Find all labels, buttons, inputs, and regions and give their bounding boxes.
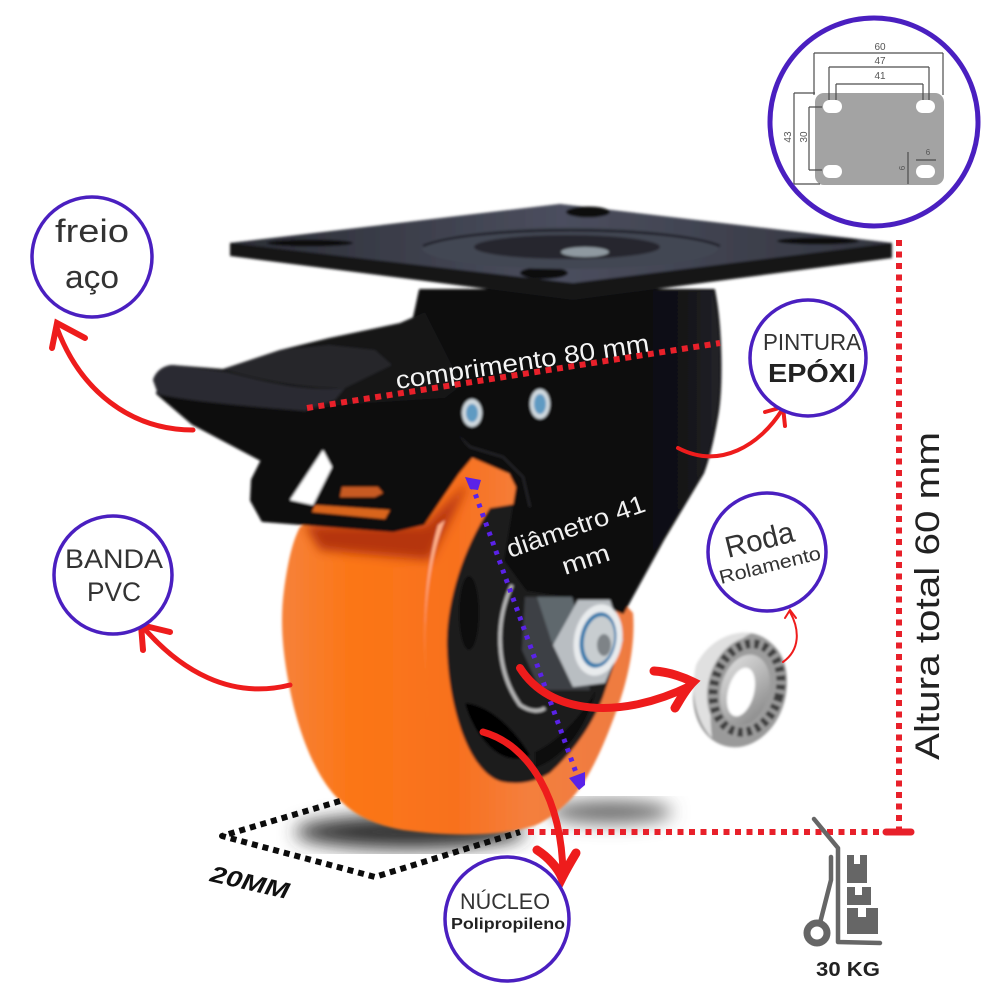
label: altura total: Altura total 60 mm <box>909 432 947 760</box>
callout: banda pvc <box>54 516 172 634</box>
icon: hand truck with boxes <box>807 819 880 943</box>
dimension numbers: 30 <box>799 131 810 143</box>
callout: roda rolamento <box>708 493 826 611</box>
ball bearing <box>681 622 799 758</box>
arrow: pintura <box>678 407 785 456</box>
arrow: freio <box>52 323 193 430</box>
label: 30 KG: 30 KG <box>816 959 880 981</box>
brake slots <box>340 487 383 497</box>
label: diametro 41 mm: diâmetro 41 <box>503 490 649 564</box>
dimension: comprimento dotted line <box>307 343 720 408</box>
top mounting plate <box>230 204 892 300</box>
callout: nucleo polipropileno: NÚCLEO <box>460 889 550 914</box>
dimension numbers: 6 <box>898 165 907 170</box>
callout: pintura epoxi <box>750 300 866 416</box>
plate dimension drawing <box>770 18 978 226</box>
dimension numbers: 47 <box>874 56 886 67</box>
callout: freio aco <box>32 197 152 317</box>
dimension numbers <box>783 42 931 170</box>
fork highlight lines <box>450 400 530 507</box>
label: 20MM: 20MM <box>207 860 293 904</box>
dimension: altura dotted line <box>528 240 899 832</box>
arrow: roda <box>783 610 797 662</box>
callout: nucleo polipropileno <box>445 857 569 981</box>
dimension numbers: 6 <box>926 148 931 157</box>
brake window <box>290 450 332 505</box>
callout: roda rolamento: Rolamento <box>717 543 823 589</box>
dimension: diametro dotted arrow <box>465 477 585 790</box>
dimension numbers: 43 <box>783 131 794 143</box>
fork body <box>400 290 720 613</box>
dimension numbers: 60 <box>874 42 886 53</box>
mounting holes <box>823 100 935 178</box>
dimension numbers: 41 <box>874 71 886 82</box>
caster wheel <box>153 204 892 834</box>
label: diametro 41 mm: mm <box>558 539 613 581</box>
callout: pintura epoxi: EPÓXI <box>768 358 856 388</box>
callout: banda pvc: BANDA <box>65 544 163 574</box>
label: comprimento 80 mm: comprimento 80 mm <box>394 329 651 395</box>
screws <box>462 389 550 427</box>
callout: nucleo polipropileno: Polipropileno <box>451 916 565 933</box>
hub openings <box>459 576 479 650</box>
plate <box>815 93 944 185</box>
wheel ground shadow <box>295 801 672 849</box>
axle nut <box>500 585 628 711</box>
dimension end cap <box>886 828 911 836</box>
black hub <box>447 500 622 783</box>
dimension: largura 20 mm dotted line <box>222 801 520 877</box>
callout: pintura epoxi: PINTURA <box>763 329 862 355</box>
arrow: bearing <box>520 668 693 708</box>
arrow: banda <box>141 625 290 689</box>
shadow under the brake <box>305 480 470 560</box>
callout: roda rolamento: Roda <box>722 516 798 565</box>
brake pedal <box>153 312 472 530</box>
arrow: nucleo <box>483 732 576 878</box>
callout: banda pvc: PVC <box>87 577 141 607</box>
tread highlight <box>425 520 445 720</box>
callout: freio aco: aço <box>65 259 119 295</box>
dimension lines <box>794 53 943 184</box>
callout: freio aco: freio <box>55 213 129 249</box>
orange PVC tread <box>282 458 633 834</box>
